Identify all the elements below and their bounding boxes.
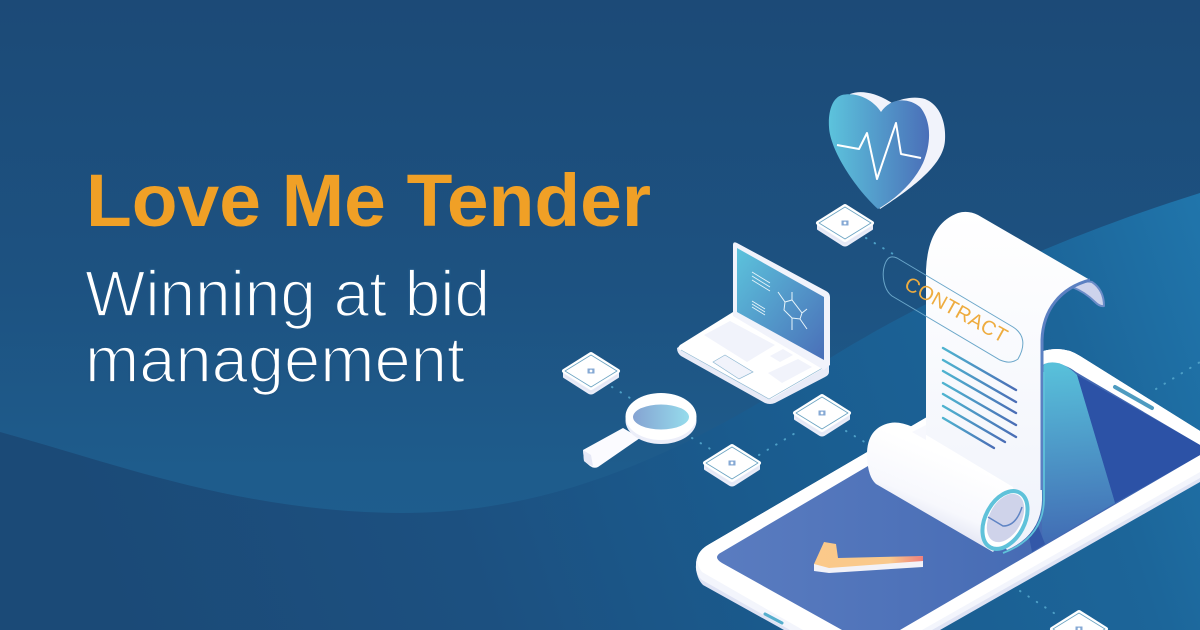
icon: heart with pulse bbox=[829, 92, 945, 209]
icon: magnifying glass bbox=[583, 393, 696, 468]
icon: smartphone bbox=[696, 349, 1200, 630]
phone body bbox=[696, 349, 1200, 630]
title: Love Me Tender bbox=[86, 159, 651, 242]
background wave bbox=[0, 193, 1200, 630]
icon: node chip lower bbox=[705, 446, 759, 486]
document roll bbox=[867, 422, 1020, 552]
phone speaker bbox=[1115, 387, 1152, 408]
laptop base bbox=[677, 313, 829, 404]
laptop keyboard bbox=[704, 321, 812, 383]
icon: node chip bottom right bbox=[1052, 612, 1106, 630]
contract lines bbox=[943, 348, 1016, 448]
laptop lid bbox=[733, 242, 830, 370]
contract pill outline bbox=[883, 257, 1023, 362]
icon: node chip middle bbox=[795, 396, 849, 436]
document blue edge bbox=[1042, 280, 1090, 490]
magnifier handle bbox=[583, 428, 640, 468]
magnifier lens bbox=[633, 404, 689, 430]
laptop touchpad bbox=[713, 355, 753, 379]
icon: check mark bbox=[814, 542, 923, 573]
laptop molecule diagram bbox=[778, 292, 807, 330]
subtitle: management bbox=[85, 324, 465, 396]
icon: node chip top bbox=[818, 206, 872, 246]
subtitle: Winning at bid bbox=[85, 258, 490, 330]
screen dark panel bbox=[1077, 375, 1200, 503]
roll end ring bbox=[973, 483, 1037, 557]
document underside curl bbox=[1072, 282, 1104, 306]
document sheet bbox=[926, 212, 1090, 550]
phone home button bbox=[765, 614, 782, 623]
laptop screen text lines bbox=[752, 272, 770, 315]
teal sheet edge bbox=[1003, 372, 1044, 553]
magnifier ring bbox=[626, 397, 696, 444]
subtitle bbox=[85, 258, 490, 396]
screen light wedge bbox=[1035, 362, 1115, 545]
icon: node chip left bbox=[564, 354, 618, 394]
icon: contract document bbox=[867, 212, 1104, 557]
laptop screen bbox=[737, 248, 824, 360]
phone screen bbox=[717, 363, 1200, 630]
roll end inner bbox=[979, 488, 1032, 548]
contract label: CONTRACT bbox=[901, 273, 1011, 348]
dotted connectors bbox=[612, 238, 1200, 617]
document shadow on screen bbox=[1027, 526, 1045, 552]
icon: laptop bbox=[677, 242, 830, 404]
